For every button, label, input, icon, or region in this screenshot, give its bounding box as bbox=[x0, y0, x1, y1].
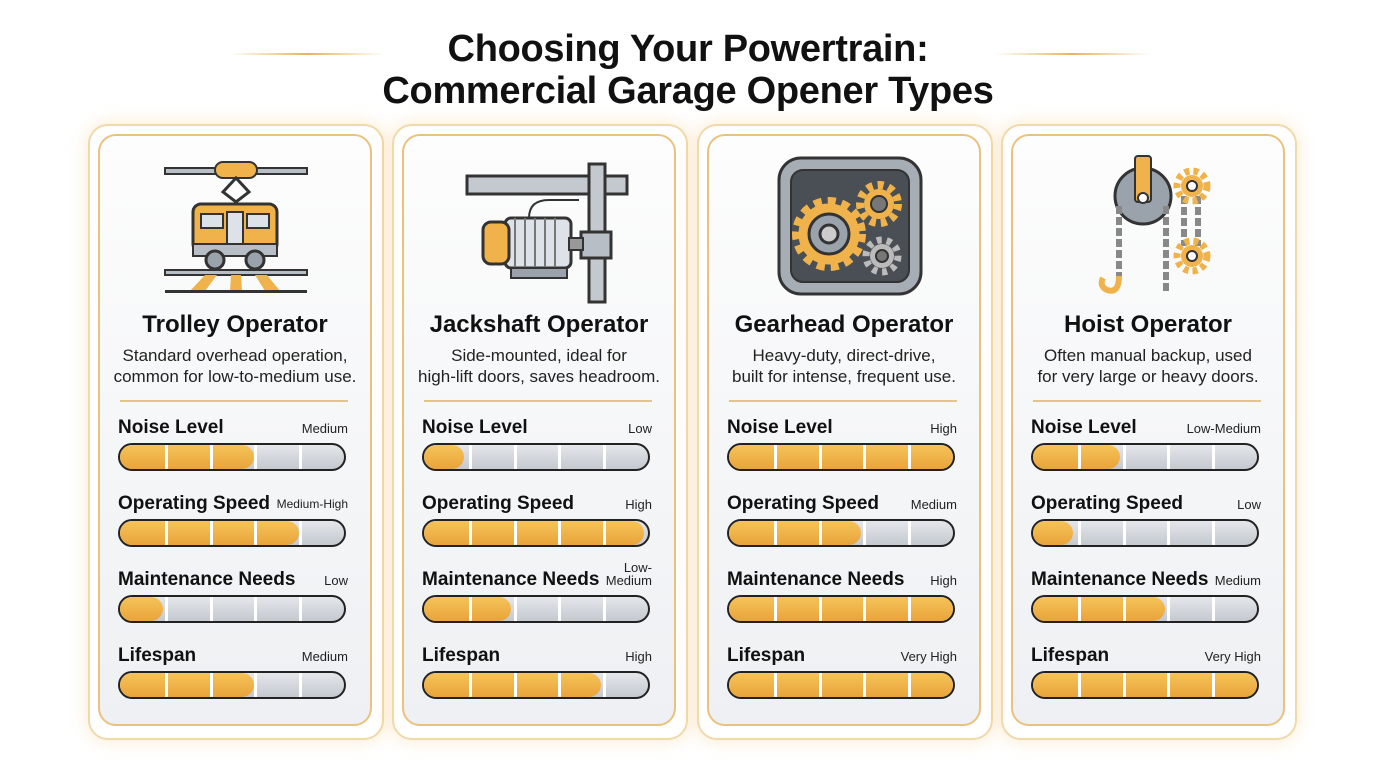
panel: jackshaft: Lifespan bbox=[422, 645, 500, 666]
icon: trolley bbox=[164, 161, 308, 293]
panel: hoist: Operating Speed bbox=[1031, 493, 1183, 514]
panel: trolley bbox=[98, 134, 372, 726]
panel: hoist: Often manual backup, used bbox=[1044, 346, 1252, 365]
panel: gearhead: High bbox=[930, 421, 957, 436]
metric: speed bbox=[118, 493, 348, 547]
panel: jackshaft: Side-mounted, ideal for bbox=[451, 346, 627, 365]
panel: jackshaft: high-lift doors, saves headroom. bbox=[418, 367, 660, 386]
description bbox=[114, 346, 356, 386]
panel: jackshaft: High bbox=[625, 497, 652, 512]
panel: jackshaft: Low bbox=[628, 421, 652, 436]
icon: jackshaft motor bbox=[466, 162, 628, 304]
icon: hoist bbox=[1098, 155, 1210, 294]
panel: gearhead: built for intense, frequent use. bbox=[732, 367, 956, 386]
metric: maintenance: Maintenance Needs bbox=[118, 569, 295, 590]
panel: gearhead: Lifespan bbox=[727, 645, 805, 666]
panel: hoist: for very large or heavy doors. bbox=[1037, 367, 1259, 386]
panel: hoist bbox=[1011, 134, 1285, 726]
metric: speed: Operating Speed bbox=[118, 493, 270, 514]
metric: maintenance: Low bbox=[324, 573, 348, 588]
panel: hoist: Medium bbox=[1215, 573, 1261, 588]
title: Choosing Your Powertrain: bbox=[448, 28, 928, 70]
panel: jackshaft: Low- bbox=[624, 560, 652, 575]
panel: jackshaft bbox=[402, 134, 676, 726]
metric: noise: Noise Level bbox=[118, 417, 224, 438]
panel: jackshaft: Operating Speed bbox=[422, 493, 574, 514]
panel: hoist: Low-Medium bbox=[1187, 421, 1261, 436]
description: Standard overhead operation, bbox=[123, 346, 347, 365]
title: Commercial Garage Opener Types bbox=[382, 70, 994, 112]
panel: hoist: Hoist Operator bbox=[1064, 311, 1232, 338]
metric: speed: Medium-High bbox=[277, 497, 348, 511]
panel: gearhead: Heavy-duty, direct-drive, bbox=[753, 346, 935, 365]
metric: lifespan: Medium bbox=[302, 649, 348, 664]
panel: jackshaft: Medium bbox=[606, 573, 652, 588]
panel: jackshaft: Jackshaft Operator bbox=[430, 311, 648, 338]
title bbox=[382, 28, 994, 112]
panel: jackshaft: Maintenance Needs bbox=[422, 569, 599, 590]
heading: Trolley Operator bbox=[142, 311, 328, 338]
panel: jackshaft: High bbox=[625, 649, 652, 664]
metric: maintenance bbox=[118, 569, 348, 623]
panel: gearhead bbox=[707, 134, 981, 726]
metric: lifespan: Lifespan bbox=[118, 645, 196, 666]
panel: gearhead: Gearhead Operator bbox=[735, 311, 953, 338]
panel: hoist: Very High bbox=[1205, 649, 1261, 664]
panel: gearhead: Maintenance Needs bbox=[727, 569, 904, 590]
panel: gearhead: Medium bbox=[911, 497, 957, 512]
panel: gearhead: Very High bbox=[901, 649, 957, 664]
panel: hoist: Lifespan bbox=[1031, 645, 1109, 666]
panel: gearhead: Noise Level bbox=[727, 417, 833, 438]
panel: jackshaft: Noise Level bbox=[422, 417, 528, 438]
panel: hoist: Noise Level bbox=[1031, 417, 1137, 438]
description: common for low-to-medium use. bbox=[114, 367, 356, 386]
panel: gearhead: Operating Speed bbox=[727, 493, 879, 514]
metric: lifespan bbox=[118, 645, 348, 699]
metric: noise bbox=[118, 417, 348, 471]
panel: hoist: Maintenance Needs bbox=[1031, 569, 1208, 590]
metric: noise: Medium bbox=[302, 421, 348, 436]
panel: gearhead: High bbox=[930, 573, 957, 588]
panel: hoist: Low bbox=[1237, 497, 1261, 512]
icon: gearbox bbox=[778, 156, 922, 296]
